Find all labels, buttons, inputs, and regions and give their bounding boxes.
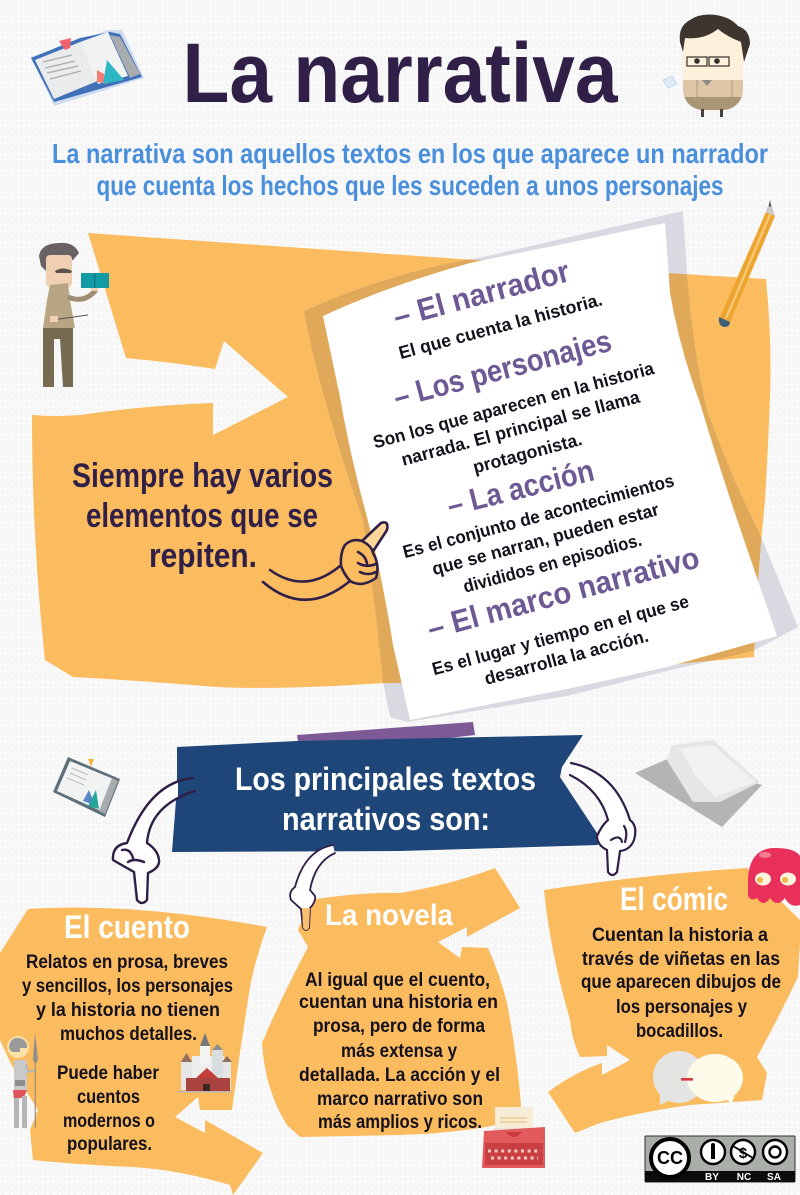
text: el comic: que aparecen dibujos de <box>581 972 781 993</box>
text: la novela: más extensa y <box>341 1041 457 1062</box>
text: paper elements: desarrolla la acción. <box>482 626 651 689</box>
icon: speech bubbles <box>653 1051 743 1105</box>
text: el cuento: muchos detalles. <box>60 1024 197 1045</box>
icon: cc license badge: CC <box>657 1148 683 1168</box>
purple tape <box>297 722 475 755</box>
subtitle <box>52 138 768 201</box>
panel: banner: narrativos son: <box>282 801 490 837</box>
icon: knight <box>7 1032 38 1128</box>
icon: narrator reading <box>39 243 109 387</box>
text: paper elements: que se narran, pueden estar <box>430 499 661 579</box>
panel: el comic <box>544 868 800 1133</box>
text: la novela: marco narrativo son <box>317 1089 483 1110</box>
text: la novela: cuentan una historia en <box>299 992 498 1013</box>
text: paper elements: narrada. El principal se llama <box>399 386 643 470</box>
text: paper elements: Son los que aparecen en la historia <box>371 358 657 452</box>
text: la novela: detallada. La acción y el <box>299 1065 500 1086</box>
text: el cuento <box>22 909 233 1155</box>
icon: small book <box>53 757 120 817</box>
title: La narrativa <box>182 26 619 120</box>
icon: ghost <box>748 848 800 906</box>
text: el cuento: modernos o <box>63 1111 155 1132</box>
icon: pointing hand <box>263 522 387 600</box>
hand: left <box>113 772 200 903</box>
panel: main orange shape <box>32 233 770 688</box>
text: el cuento: Relatos en prosa, breves <box>26 952 228 973</box>
icon: typewriter <box>482 1107 545 1168</box>
text: el comic: los personajes y <box>616 997 747 1018</box>
icon: cc license badge: SA <box>767 1172 781 1183</box>
text: paper elements: Es el conjunto de acontecimientos <box>401 470 676 562</box>
icon: paper stack <box>635 740 762 827</box>
panel: el cuento <box>0 907 267 1195</box>
icon: castle <box>178 1033 232 1092</box>
hand: middle <box>290 845 335 930</box>
text: el comic: través de viñetas en las <box>582 949 780 970</box>
text: paper elements: protagonista. <box>471 429 584 477</box>
text: el comic <box>581 881 781 1042</box>
text: el comic: El cómic <box>620 881 728 917</box>
text: caption on orange: Siempre hay varios <box>72 457 333 495</box>
text: paper elements: Es el lugar y tiempo en el que se <box>430 591 691 679</box>
text: la novela: Al igual que el cuento, <box>305 970 490 991</box>
icon: pencil <box>719 200 775 327</box>
text: paper elements: divididos en episodios. <box>461 530 644 597</box>
panel: la novela <box>262 868 522 1137</box>
icon: cc license badge: BY <box>705 1172 719 1183</box>
panel: banner <box>172 735 598 852</box>
icon: cc license badge <box>645 1136 795 1183</box>
text: el cuento: populares. <box>67 1134 152 1155</box>
panel: banner: Los principales textos <box>235 761 536 797</box>
text: paper elements: – Los personajes <box>390 323 615 415</box>
text: caption on orange: elementos que se <box>86 497 318 535</box>
text: paper elements: – La acción <box>443 453 597 523</box>
panel: white paper <box>323 223 777 720</box>
text: paper elements <box>371 254 703 689</box>
text: el cuento: El cuento <box>64 909 190 945</box>
text: paper elements: – El marco narrativo <box>424 540 703 646</box>
text: caption on orange <box>72 457 333 575</box>
text: la novela: más amplios y ricos. <box>318 1112 482 1133</box>
icon: open book top left <box>31 30 144 106</box>
text: la novela: La novela <box>325 899 453 932</box>
text: caption on orange: repiten. <box>149 537 257 575</box>
text: paper elements: – El narrador <box>389 254 573 334</box>
text: el cuento: Puede haber <box>57 1063 160 1084</box>
paper shadow <box>304 211 798 722</box>
hand: right <box>570 763 635 875</box>
text: la novela: prosa, pero de forma <box>313 1016 485 1037</box>
icon: cc license badge: $ <box>739 1145 748 1162</box>
icon: cc license badge: NC <box>737 1172 751 1183</box>
icon: man with glasses <box>663 15 750 117</box>
text: el cuento: y sencillos, los personajes <box>22 976 233 997</box>
text: el comic: bocadillos. <box>636 1021 723 1042</box>
text: paper elements: El que cuenta la historia. <box>396 289 604 363</box>
text: el cuento: cuentos <box>77 1087 140 1108</box>
text: la novela <box>299 899 500 1133</box>
text: el cuento: y la historia no tienen <box>36 1000 220 1021</box>
text: el comic: Cuentan la historia a <box>592 925 768 946</box>
